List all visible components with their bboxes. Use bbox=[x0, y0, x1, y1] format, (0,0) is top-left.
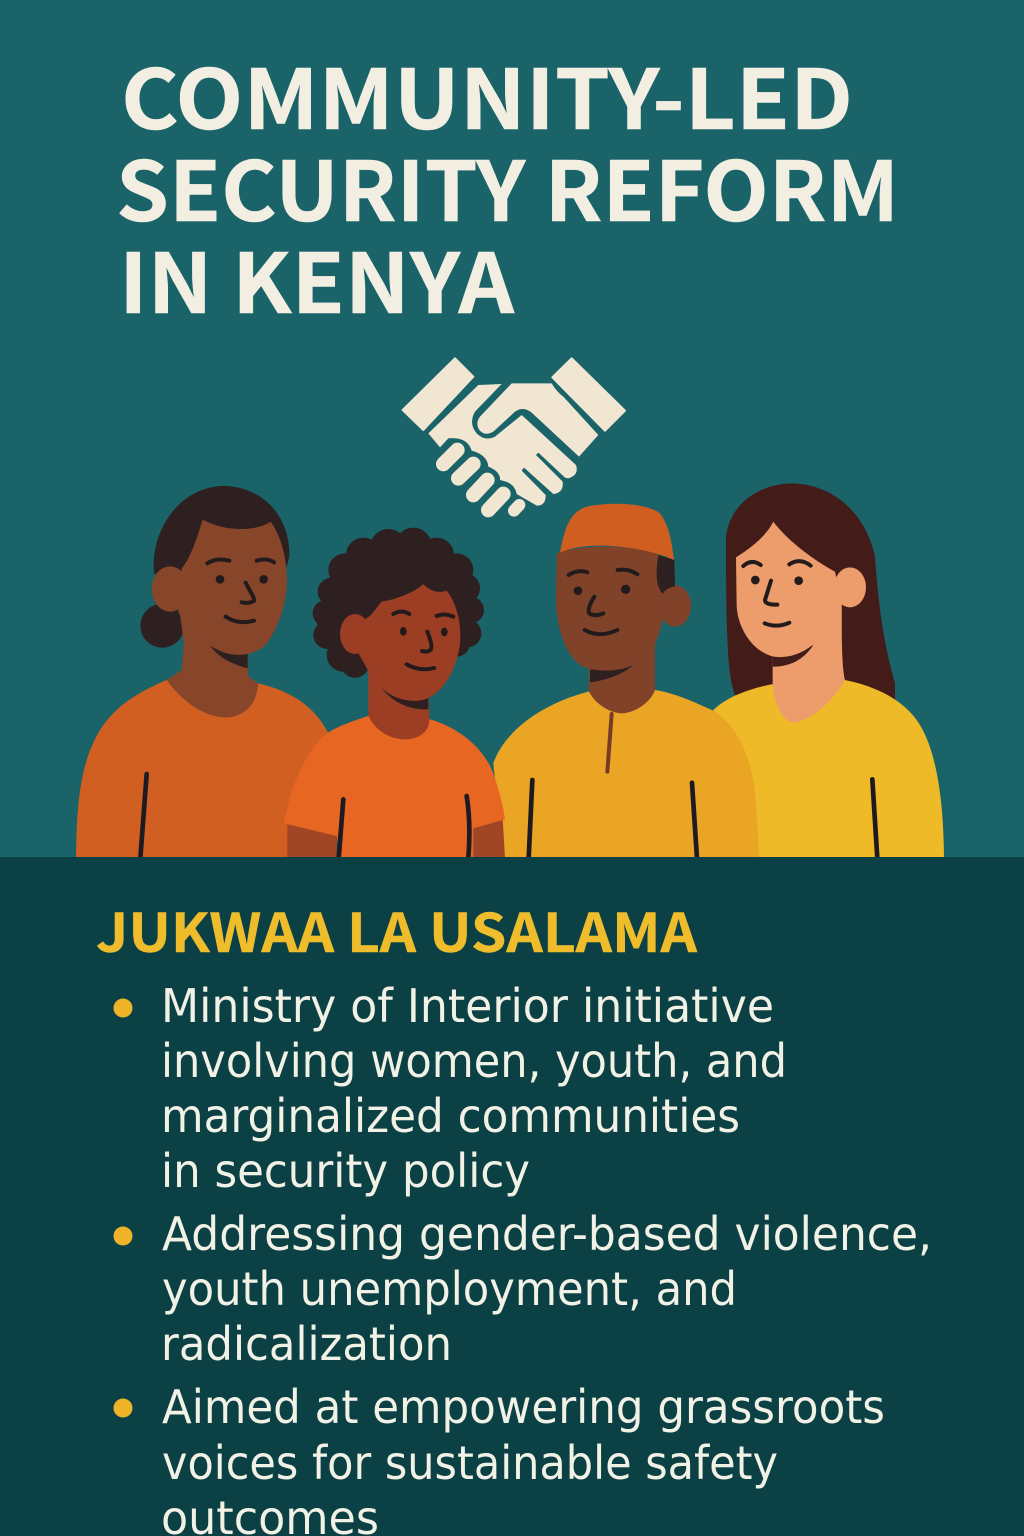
person: man with orange cap bbox=[493, 504, 759, 858]
title: SECURITY REFORM bbox=[116, 126, 899, 245]
upper background panel bbox=[0, 0, 1024, 858]
bullet point 2: Addressing gender-based violence, bbox=[162, 1207, 932, 1261]
title: COMMUNITY-LED bbox=[121, 34, 853, 153]
person: woman with long hair bbox=[713, 483, 944, 858]
illustration: four community members bbox=[76, 483, 944, 858]
heading: Jukwaa La Usalama: JUKWAA LA USALAMA bbox=[96, 892, 698, 968]
person: child with curly hair bbox=[284, 528, 505, 858]
title bbox=[116, 34, 899, 337]
bullet point 3 bbox=[114, 1380, 885, 1536]
bullet point 1 bbox=[114, 979, 787, 1198]
title: IN KENYA bbox=[119, 218, 514, 337]
bullet point 1: in security policy bbox=[161, 1144, 530, 1198]
bullet point 1: Ministry of Interior initiative bbox=[161, 979, 774, 1033]
lower text panel bbox=[0, 857, 1024, 1536]
bullet point 3: Aimed at empowering grassroots bbox=[162, 1380, 885, 1434]
icon: handshake bbox=[403, 358, 625, 511]
bullet point 2: youth unemployment, and bbox=[162, 1262, 737, 1316]
bullet point 3: voices for sustainable safety bbox=[162, 1436, 778, 1490]
bullet point 1: involving women, youth, and bbox=[161, 1034, 787, 1088]
bullet point 2: radicalization bbox=[161, 1317, 452, 1371]
bullet point 1: marginalized communities bbox=[161, 1089, 740, 1143]
bullet point 2 bbox=[114, 1207, 932, 1371]
person: woman with hair bun bbox=[76, 486, 328, 858]
